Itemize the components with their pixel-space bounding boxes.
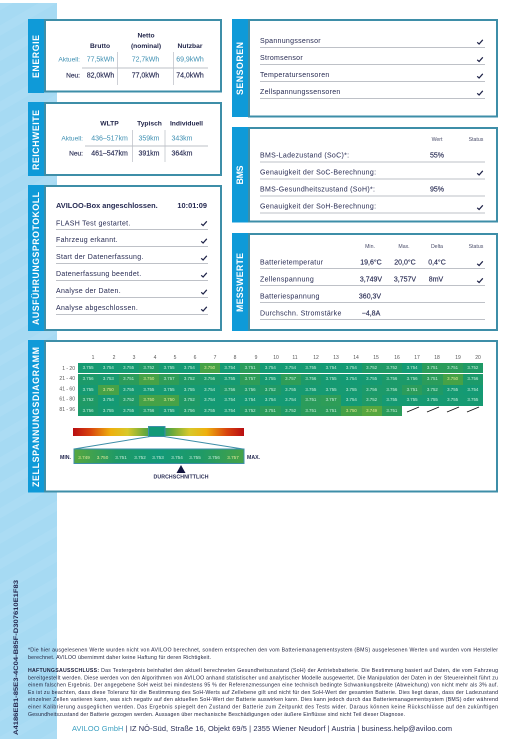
cell voltage heat table: 3.756 xyxy=(143,408,154,413)
disclaimer: einzelner Zellen variieren kann, was sich negativ auf den aktuellen SoH-Wert der Batterie auswirken kann. Dies kann jedoch durch das Batteriemanagementsystem (BMS) oder während xyxy=(28,697,498,703)
panel: messwerte: Batterietemperatur xyxy=(260,260,324,266)
cell voltage heat table: 3.754 xyxy=(184,365,195,370)
cell voltage heat table: 3.754 xyxy=(467,387,478,392)
cell voltage heat table: 3.750 xyxy=(143,376,154,381)
column headers: 17 xyxy=(414,355,420,361)
disclaimer: einem falschen Ergebnis. Der angegebene SoH weist bei mindestens 95 % der Referenzmessungen eine technisch bedingte Schwankungsbreite (Abweichung) von nicht mehr als 3% auf. xyxy=(28,682,498,688)
cell voltage heat table: 3.756 xyxy=(245,387,256,392)
cell voltage heat table: 3.754 xyxy=(265,397,276,402)
row labels: 41 - 60 xyxy=(59,386,75,392)
panel: energie xyxy=(28,19,221,93)
panel: ausführungsprotokoll: 10:01:09 xyxy=(177,201,207,210)
cell voltage heat table: 3.755 xyxy=(265,376,276,381)
column headers: 5 xyxy=(174,355,177,361)
cell voltage heat table: 3.755 xyxy=(83,365,94,370)
panel: reichweite: 436–517km xyxy=(91,136,128,142)
cell voltage heat table: 3.755 xyxy=(123,387,134,392)
row labels: 1 - 20 xyxy=(62,366,75,372)
panel: reichweite: 343km xyxy=(171,136,193,142)
disclaimer: HAFTUNGSAUSSCHLUSS: Das Testergebnis beinhaltet den aktuell berechneten Gesundheitszustand (SoH) der Antriebsbatterie. Die Bestimmung basiert auf Daten, die vom Fahrzeug xyxy=(28,668,498,674)
panel: energie: Aktuell: xyxy=(58,56,80,64)
cell voltage heat table: 3.755 xyxy=(447,387,458,392)
cell voltage heat table: 3.751 xyxy=(123,376,134,381)
cell voltage heat table: 3.755 xyxy=(346,387,357,392)
cell voltage heat table: 3.752 xyxy=(285,408,296,413)
column headers: 1 xyxy=(92,355,95,361)
zoomed range bar: 3.752 xyxy=(134,455,146,460)
cell voltage heat table: 3.756 xyxy=(224,387,235,392)
panel: bms: BMS-Gesundheitszustand (SoH)*: xyxy=(260,186,375,194)
cell voltage heat table: 3.753 xyxy=(103,376,114,381)
column headers: 15 xyxy=(373,355,379,361)
cell voltage heat table: 3.755 xyxy=(164,365,175,370)
zoomed range bar: MIN. xyxy=(60,455,72,461)
cell voltage heat table: 3.754 xyxy=(346,365,357,370)
panel: energie: Brutto xyxy=(90,43,110,50)
cell voltage heat table: 3.752 xyxy=(83,397,94,402)
panel: bms: BMS xyxy=(235,165,245,184)
panel: sensoren: SENSOREN xyxy=(235,42,245,95)
panel: energie: 74,0kWh xyxy=(176,72,204,80)
cell voltage heat table: 3.751 xyxy=(265,408,276,413)
panel: ausführungsprotokoll: Start der Datenerfassung. xyxy=(56,254,144,261)
cell voltage heat table: 3.754 xyxy=(346,376,357,381)
panel: reichweite: 364km xyxy=(171,150,193,158)
cell voltage heat table: 3.751 xyxy=(305,408,316,413)
cell voltage heat table: 3.754 xyxy=(103,397,114,402)
column headers: 9 xyxy=(255,355,258,361)
cell voltage heat table: 3.755 xyxy=(427,397,438,402)
cell voltage heat table: 3.754 xyxy=(103,365,114,370)
column headers: 2 xyxy=(113,355,116,361)
panel: messwerte: 360,3V xyxy=(359,294,381,300)
cell voltage heat table: 3.757 xyxy=(164,376,175,381)
colour scale bar xyxy=(73,426,244,449)
panel: messwerte: 8mV xyxy=(429,276,444,284)
panel: reichweite: Individuell xyxy=(170,120,203,128)
panel: sensoren: Temperatursensoren xyxy=(260,72,330,79)
cell voltage heat table: 3.755 xyxy=(326,387,337,392)
panel: sensoren: Stromsensor xyxy=(260,55,303,62)
panel: reichweite: Aktuell: xyxy=(61,136,83,142)
cell voltage heat table: 3.751 xyxy=(407,387,418,392)
column headers: 19 xyxy=(455,355,461,361)
panel: energie: (nominal) xyxy=(131,43,161,50)
panel: ausführungsprotokoll: Datenerfassung beendet. xyxy=(56,271,142,278)
panel: messwerte: Max. xyxy=(398,244,410,250)
cell voltage heat table: 3.755 xyxy=(123,365,134,370)
cell voltage heat table: 3.751 xyxy=(245,365,256,370)
cell voltage heat table: 3.751 xyxy=(427,365,438,370)
cell voltage heat table: 3.755 xyxy=(123,408,134,413)
panel: messwerte: Status xyxy=(469,244,484,250)
cell voltage heat table: 3.750 xyxy=(447,376,458,381)
panel: ausführungsprotokoll: FLASH Test gestartet. xyxy=(56,220,131,228)
panel: messwerte: 0,4°C xyxy=(428,258,446,266)
cell voltage heat table: 3.754 xyxy=(245,397,256,402)
panel: ausführungsprotokoll: Analyse abgeschlossen. xyxy=(56,305,138,312)
cell voltage heat table: 3.754 xyxy=(407,365,418,370)
cell voltage heat table: 3.755 xyxy=(184,387,195,392)
cell voltage heat table: 3.754 xyxy=(204,387,215,392)
zoomed range bar: 3.750 xyxy=(97,455,109,460)
column headers: 20 xyxy=(475,355,481,361)
panel: messwerte xyxy=(232,233,497,331)
cell voltage heat table: 3.756 xyxy=(407,376,418,381)
cell voltage heat table: 3.757 xyxy=(326,397,337,402)
column headers: 16 xyxy=(394,355,400,361)
cell voltage heat table: 3.756 xyxy=(204,376,215,381)
panel: reichweite: WLTP xyxy=(100,120,119,128)
panel: messwerte: 3,749V xyxy=(360,276,382,284)
column headers: 3 xyxy=(133,355,136,361)
panel: zellspannungsdiagramm xyxy=(28,340,497,492)
cell voltage heat table: 3.756 xyxy=(83,408,94,413)
panel: ausführungsprotokoll: AVILOO-Box angeschlossen. xyxy=(56,201,158,210)
panel: messwerte: MESSWERTE xyxy=(235,253,245,312)
panel: energie: Netto xyxy=(137,32,155,40)
cell voltage heat table: 3.750 xyxy=(204,365,215,370)
zoomed range bar: 3.751 xyxy=(115,455,127,460)
cell voltage heat table: 3.751 xyxy=(326,408,337,413)
panel: bms: Genauigkeit der SoC-Berechnung: xyxy=(260,170,376,176)
zoomed range bar: 3.755 xyxy=(189,455,201,460)
panel: bms: 55% xyxy=(430,152,444,160)
panel: messwerte: Delta xyxy=(431,244,443,250)
column headers: 7 xyxy=(214,355,217,361)
cell voltage heat table: 3.752 xyxy=(386,365,397,370)
panel: messwerte: Min. xyxy=(365,244,375,250)
panel: ausführungsprotokoll: AUSFÜHRUNGSPROTOKOLL xyxy=(31,191,41,325)
zoomed range bar: 3.749 xyxy=(78,455,90,460)
cell voltage heat table: 3.755 xyxy=(386,397,397,402)
cell voltage heat table: 3.755 xyxy=(164,387,175,392)
panel: energie: 77,0kWh xyxy=(132,72,159,80)
cell voltage heat table: 3.750 xyxy=(346,408,357,413)
cell voltage heat table: 3.756 xyxy=(305,376,316,381)
cell voltage heat table: 3.754 xyxy=(204,397,215,402)
panel: energie: 69,9kWh xyxy=(176,56,204,64)
cell voltage heat table: 3.756 xyxy=(467,376,478,381)
column headers: 14 xyxy=(353,355,359,361)
zoomed range bar: MAX. xyxy=(247,455,261,461)
footnote: *Die hier ausgelesenen Werte wurden nicht von AVILOO berechnet, sondern entsprechen den vom Batteriemanagementsystem (BMS) ausgelesenen Werten und wurden vom Hersteller xyxy=(28,648,498,654)
column headers: 11 xyxy=(292,355,298,361)
panel: bms: Status xyxy=(469,137,484,143)
cell voltage heat table: 3.756 xyxy=(386,387,397,392)
panel: sensoren: Spannungssensor xyxy=(260,38,321,45)
zoomed range bar: 3.757 xyxy=(227,455,239,460)
cell voltage heat table: 3.757 xyxy=(245,376,256,381)
column headers: 6 xyxy=(194,355,197,361)
panel: reichweite: Typisch xyxy=(137,120,162,128)
cell voltage heat table: 3.754 xyxy=(326,365,337,370)
panel: reichweite: REICHWEITE xyxy=(31,110,41,170)
panel: energie: 77,5kWh xyxy=(87,56,114,64)
cell voltage heat table: 3.752 xyxy=(366,365,377,370)
column headers: 13 xyxy=(333,355,339,361)
panel: messwerte: Zellenspannung xyxy=(260,276,314,284)
footer contact line: AVILOO GmbH | IZ NÖ-Süd, Straße 16, Objekt 69/5 | 2355 Wiener Neudorf | Austria | business.help@aviloo.com xyxy=(72,724,452,733)
zoomed range bar xyxy=(60,449,261,464)
cell voltage heat table: 3.752 xyxy=(184,397,195,402)
footnote xyxy=(28,648,498,661)
cell voltage heat table: 3.754 xyxy=(224,408,235,413)
cell voltage heat table: 3.754 xyxy=(224,365,235,370)
average marker: DURCHSCHNITTLICH xyxy=(154,474,209,480)
cell voltage heat table: 3.755 xyxy=(143,387,154,392)
cell voltage heat table: 3.755 xyxy=(447,397,458,402)
column headers: 8 xyxy=(234,355,237,361)
panel: sensoren xyxy=(232,19,497,117)
panel: energie: ENERGIE xyxy=(31,35,41,78)
panel: messwerte: 20,0°C xyxy=(394,258,416,266)
document id: A4186EB1-85E3-4C04-B85F-D307610E1F83 xyxy=(13,579,20,735)
zoomed range bar: 3.754 xyxy=(171,455,183,460)
cell voltage heat table: 3.752 xyxy=(467,365,478,370)
column headers: 10 xyxy=(273,355,279,361)
column headers: 12 xyxy=(313,355,319,361)
cell voltage heat table: 3.755 xyxy=(224,376,235,381)
panel: bms xyxy=(232,127,497,222)
average marker xyxy=(154,465,209,480)
cell voltage heat table: 3.755 xyxy=(467,397,478,402)
column headers: 18 xyxy=(434,355,440,361)
cell voltage heat table: 3.754 xyxy=(265,365,276,370)
cell voltage heat table: 3.754 xyxy=(285,397,296,402)
panel: messwerte: Durchschn. Stromstärke xyxy=(260,310,342,318)
panel: bms: 95% xyxy=(430,186,444,194)
cell voltage heat table: 3.749 xyxy=(366,408,377,413)
row labels: 81 - 96 xyxy=(59,407,75,413)
panel: reichweite: 391km xyxy=(138,150,160,158)
cell voltage heat table: 3.752 xyxy=(143,365,154,370)
panel: energie: Neu: xyxy=(66,72,80,80)
panel: energie: 72,7kWh xyxy=(132,56,159,64)
cell voltage heat table xyxy=(78,363,483,416)
disclaimer: Es ist zu beachten, dass diese Toleranz für die Bestimmung des SoH-Werts auf Zellebene gilt und nicht für den SoH-Wert der gesamten Batterie. Dies liegt daran, dass der Ladezustand xyxy=(28,690,498,696)
cell voltage heat table: 3.754 xyxy=(224,397,235,402)
cell voltage heat table: 3.756 xyxy=(184,408,195,413)
cell voltage heat table: 3.755 xyxy=(305,387,316,392)
cell voltage heat table: 3.755 xyxy=(326,376,337,381)
cell voltage heat table: 3.754 xyxy=(346,397,357,402)
cell voltage heat table: 3.752 xyxy=(265,387,276,392)
cell voltage heat table: 3.751 xyxy=(386,408,397,413)
panel: messwerte: −4,8A xyxy=(362,310,381,318)
panel: energie: Nutzbar xyxy=(178,43,203,50)
column headers: 4 xyxy=(154,355,157,361)
panel: ausführungsprotokoll xyxy=(28,185,221,331)
zoomed range bar: 3.756 xyxy=(208,455,220,460)
panel: bms: BMS-Ladezustand (SoC)*: xyxy=(260,152,349,160)
cell voltage heat table: 3.756 xyxy=(83,376,94,381)
panel: sensoren: Zellspannungssensoren xyxy=(260,89,341,96)
cell voltage heat table: 3.756 xyxy=(386,376,397,381)
cell voltage heat table: 3.757 xyxy=(285,376,296,381)
panel: reichweite: Neu: xyxy=(69,150,83,158)
panel: zellspannungsdiagramm: ZELLSPANNUNGSDIAGRAMM xyxy=(31,347,41,487)
cell voltage heat table: 3.750 xyxy=(164,397,175,402)
cell voltage heat table: 3.751 xyxy=(447,365,458,370)
disclaimer: bereitgestellt werden. Diese werden von den Algorithmen von AVILOO anhand statistischer und analytischer Modelle ausgewertet. Die Manipulation der Daten in der Steuereinheit führt zu xyxy=(28,676,498,682)
cell voltage heat table: 3.750 xyxy=(143,397,154,402)
row labels xyxy=(59,366,75,413)
panel: reichweite xyxy=(28,102,221,176)
panel: reichweite: 359km xyxy=(138,136,160,142)
cell voltage heat table: 3.755 xyxy=(83,387,94,392)
disclaimer xyxy=(28,668,498,718)
panel: messwerte: Batteriespannung xyxy=(260,294,320,300)
panel: messwerte: 19,6°C xyxy=(360,258,382,266)
cell voltage heat table: 3.755 xyxy=(164,408,175,413)
cell voltage heat table: 3.755 xyxy=(366,376,377,381)
empty cell dashes xyxy=(407,407,479,412)
cell voltage heat table: 3.751 xyxy=(305,397,316,402)
row labels: 61 - 80 xyxy=(59,396,75,402)
disclaimer: Gesundheitszustand der Batterie gezogen werden. Aussagen über mechanische Beschädigungen oder äußere Einflüsse sind nicht Teil dieser Diagnose. xyxy=(28,712,405,718)
cell voltage heat table: 3.752 xyxy=(245,408,256,413)
cell voltage heat table: 3.752 xyxy=(184,376,195,381)
panel: energie: 82,0kWh xyxy=(87,72,114,80)
footnote: berechnet. AVILOO übernimmt daher keine Haftung für deren Richtigkeit. xyxy=(28,655,211,661)
cell voltage heat table: 3.752 xyxy=(366,397,377,402)
cell voltage heat table: 3.751 xyxy=(427,376,438,381)
panel: ausführungsprotokoll: Analyse der Daten. xyxy=(56,288,121,295)
cell voltage heat table: 3.755 xyxy=(285,387,296,392)
row labels: 21 - 40 xyxy=(59,376,75,382)
cell voltage heat table: 3.755 xyxy=(103,408,114,413)
panel: messwerte: 3,757V xyxy=(394,276,416,284)
decorative side strip xyxy=(0,3,57,739)
cell voltage heat table: 3.755 xyxy=(305,365,316,370)
cell voltage heat table: 3.754 xyxy=(285,365,296,370)
cell voltage heat table: 3.752 xyxy=(123,397,134,402)
cell voltage heat table: 3.752 xyxy=(427,387,438,392)
panel: bms: Genauigkeit der SoH-Berechnung: xyxy=(260,204,376,210)
zoomed range bar: 3.753 xyxy=(152,455,164,460)
panel: ausführungsprotokoll: Fahrzeug erkannt. xyxy=(56,237,118,244)
cell voltage heat table: 3.755 xyxy=(204,408,215,413)
cell voltage heat table: 3.755 xyxy=(407,397,418,402)
disclaimer: einer Kalibrierung ausgeglichen werden. Das Ergebnis spiegelt den Zustand der Batterie zum Zeitpunkt des Tests wider. Daraus können keine Rückschlüsse auf den zukünftigen xyxy=(28,704,498,710)
cell voltage heat table: 3.756 xyxy=(366,387,377,392)
column headers xyxy=(92,355,481,361)
panel: reichweite: 461–547km xyxy=(91,150,128,158)
panel: bms: Wert xyxy=(432,137,443,143)
cell voltage heat table: 3.750 xyxy=(103,387,114,392)
